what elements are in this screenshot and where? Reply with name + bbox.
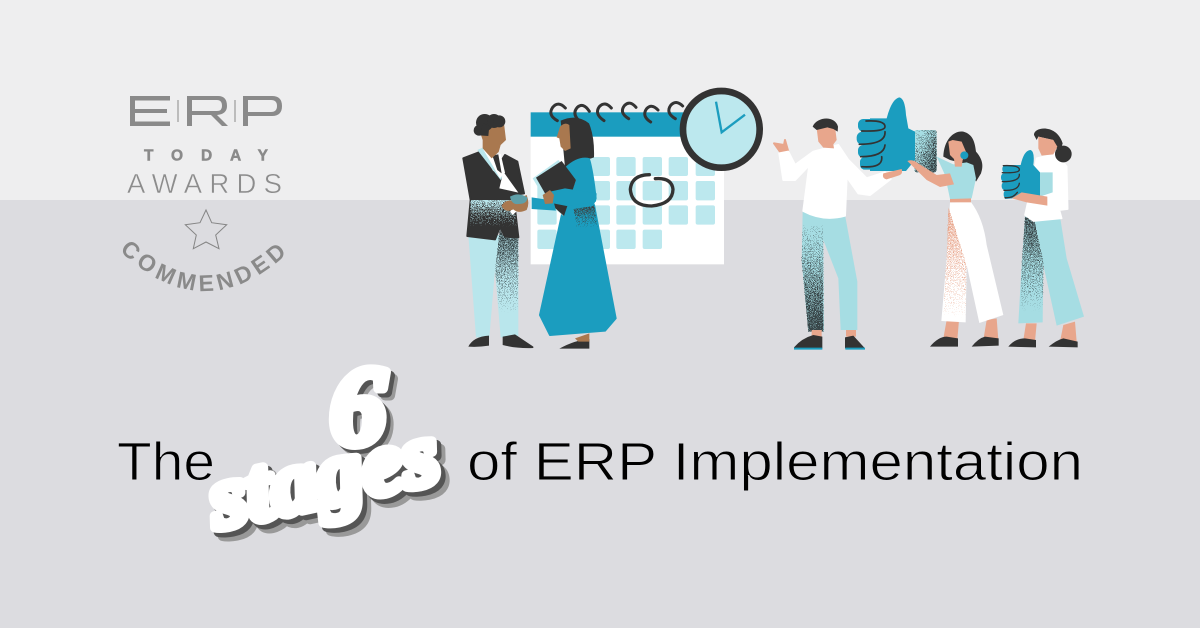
- script numeral 6: 6: [330, 345, 386, 469]
- background: lower band: [0, 200, 1200, 628]
- script word stages: stages: [203, 407, 451, 553]
- logo word TODAY: TODAY: [144, 148, 269, 164]
- calendar: [531, 102, 724, 264]
- man in white with big thumb: [774, 97, 937, 350]
- illustration: calendar and handshake: [463, 91, 760, 349]
- script word stages: stages: [199, 403, 447, 549]
- illustration: team with thumbs up: [774, 97, 1084, 350]
- headline word: The: The: [117, 432, 215, 492]
- headline phrase: of ERP Implementation: of ERP Implementation: [467, 432, 1083, 492]
- woman with top and white trousers: [907, 131, 1003, 347]
- clock: [683, 91, 760, 168]
- logo word AWARDS: AWARDS: [127, 168, 282, 199]
- logo word COMMENDED on curve: COMMENDED: [122, 242, 284, 292]
- icon: star outline: [185, 210, 227, 249]
- background: upper band: [0, 0, 1200, 200]
- woman with small thumb: [1001, 128, 1084, 347]
- script numeral 6: 6: [337, 352, 393, 476]
- man in suit: [463, 114, 533, 348]
- headline: [117, 345, 1083, 557]
- hand-drawn circle mark: [630, 175, 673, 206]
- script word stages: stages: [207, 411, 455, 557]
- script numeral 6: 6: [334, 349, 390, 473]
- woman in teal dress: [532, 118, 616, 349]
- logo: ERP Today Awards Commended: [122, 96, 284, 292]
- logo wordmark ERP: [130, 96, 282, 126]
